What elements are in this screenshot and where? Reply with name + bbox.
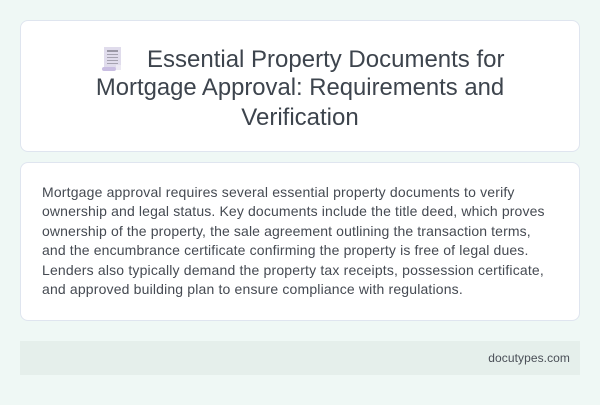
panel: description card	[20, 162, 580, 321]
text line 4: and the encumbrance certificate confirming the property is free of legal dues.	[42, 242, 528, 258]
text line 6: and approved building plan to ensure compliance with regulations.	[42, 281, 463, 297]
text line 5: Lenders also typically demand the property tax receipts, possession certificate,	[42, 262, 544, 278]
text line 2: ownership and legal status. Key documents include the title deed, which proves	[42, 203, 545, 219]
text line 3: ownership of the property, the sale agreement outlining the transaction terms,	[42, 223, 531, 239]
heading: title line 3: Verification	[241, 104, 359, 131]
heading: title line 1: Essential Property Documents for	[147, 46, 504, 73]
text line 1: Mortgage approval requires several essential property documents to verify	[42, 184, 515, 200]
panel: title card	[20, 20, 580, 152]
footer source text: docutypes.com	[488, 351, 570, 365]
footer bar	[20, 341, 580, 375]
heading: title line 2: Mortgage Approval: Requirements and	[96, 74, 504, 101]
icon: document scroll	[102, 47, 121, 71]
